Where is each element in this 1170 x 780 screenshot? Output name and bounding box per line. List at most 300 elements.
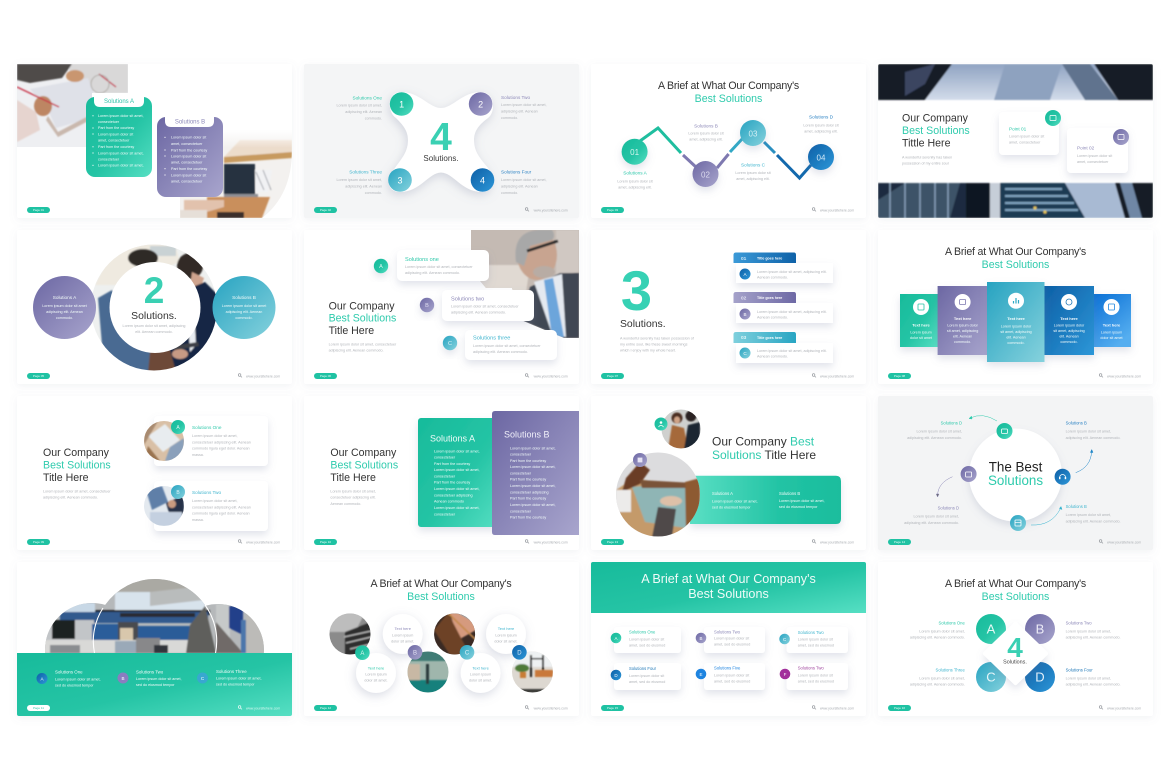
label D: Lorem ipsum dolor sit	[803, 124, 839, 128]
footer	[888, 539, 1141, 545]
label B: Solutions B	[694, 124, 718, 128]
text: Solutions One: adipiscing elit. Aenean	[345, 110, 382, 114]
petal A	[976, 614, 1006, 644]
item 03: Title goes here	[757, 336, 782, 340]
slide 10: overlapping solutions panels	[304, 396, 579, 550]
footer: Page 11	[33, 706, 44, 710]
text circle 4: Lorem ipsum	[470, 672, 491, 676]
slide 8: five column panels	[878, 230, 1153, 384]
photo: glass building	[434, 613, 476, 655]
item A: sed do eiusmod tempor	[55, 684, 94, 688]
item B: Solutions Two	[136, 669, 164, 674]
card: Solutions A: Lorem ipsum dolor sit amet,	[98, 114, 144, 118]
paragraph: Lorem ipsum dolor sit amet, consectetuer	[329, 342, 397, 346]
card E: Lorem ipsum dolor sit	[714, 674, 749, 678]
photo: hands on laptop	[616, 452, 700, 537]
title: Our Company	[902, 112, 969, 124]
badge A: A	[379, 264, 383, 270]
text: Solutions Four: Lorem ipsum dolor sit amet,	[501, 178, 546, 182]
text: Solutions Three: Solutions Three	[936, 668, 965, 672]
teal panel: Solutions A	[712, 491, 733, 496]
heading: The Best	[989, 460, 1043, 474]
teal panel	[690, 476, 841, 524]
slide 12: four photos with text circles	[310, 579, 573, 716]
badge C: C	[465, 651, 470, 657]
footer: Page 12	[320, 706, 331, 710]
card F	[780, 663, 848, 690]
badge C: C	[448, 341, 452, 347]
card C: Solutions Two	[798, 630, 824, 635]
photo: open office	[45, 579, 264, 653]
header band	[591, 562, 866, 613]
text circle 2: Text here	[498, 626, 515, 631]
footer	[314, 539, 568, 545]
slide 5: two solutions around a photo	[23, 244, 286, 384]
text: Solutions Three: commodo.	[365, 191, 382, 195]
panel: Solutions A: consectetuer	[434, 474, 456, 478]
zig-zag line	[640, 128, 811, 178]
card: Solutions B: Part from the courtesy	[171, 167, 207, 171]
card one: Solutions One	[192, 425, 222, 430]
photo: teal interior	[407, 651, 449, 693]
teal panel: sed do eiusmod tempor	[779, 505, 818, 509]
footer: Page 03	[607, 208, 618, 212]
title: Our Company	[43, 447, 110, 459]
slide 2: four solutions X shape	[304, 64, 579, 218]
card two: Lorem ipsum dolor sit amet, consectetuer	[451, 304, 519, 308]
text: Solutions Three: Solutions Three	[349, 170, 382, 174]
card three	[465, 330, 557, 360]
panel: Solutions B: Part from the courtesy	[510, 497, 546, 501]
item A	[36, 669, 100, 688]
panel: Solutions B: Lorem ipsum dolor sit amet,	[510, 446, 556, 450]
circle 3: 3	[397, 176, 403, 186]
item 03: C	[743, 351, 747, 356]
text circle 3: Text here	[368, 666, 385, 670]
paragraph: A wonderful serenity has taken	[902, 155, 952, 159]
photo: businessmen	[90, 244, 218, 372]
icon: right	[1055, 469, 1071, 485]
badge B: B	[425, 303, 429, 309]
text: bottom right: Solutions B	[1066, 504, 1087, 509]
circle 2: 2	[478, 100, 483, 110]
column 1	[900, 294, 938, 347]
slide 3: zig-zag timeline	[591, 64, 866, 218]
badge B: B	[176, 490, 180, 496]
title: Title Here	[329, 325, 374, 337]
icon: bottom	[1010, 515, 1026, 531]
card: Solutions B: Solutions B	[175, 120, 205, 126]
paragraph: Lorem ipsum dolor sit amet, adipiscing	[123, 324, 185, 328]
text: Solutions One: Solutions One	[938, 620, 965, 626]
node 01	[622, 139, 648, 165]
footer: www.yoursitehere.com	[534, 208, 568, 212]
card two: Solutions two	[451, 296, 484, 302]
right circle: Solutions B: Solutions B	[232, 295, 256, 300]
card B: B	[699, 636, 703, 641]
card: Solutions B: amet, consectetuer	[171, 142, 203, 146]
footer: www.yoursitehere.com	[820, 208, 854, 212]
badge: person icon	[654, 418, 668, 430]
panel: Solutions A: Part from the courtesy	[434, 462, 470, 466]
card: Point 02: Point 02	[1077, 146, 1095, 150]
text circle 3: Lorem ipsum	[365, 672, 387, 676]
left circle: Solutions A: adipiscing elit. Aenean	[46, 310, 83, 314]
slide 6: three solution cards beside portrait	[304, 230, 579, 384]
paragraph: my entire soul, like these sweet mornings	[620, 342, 688, 346]
column 1: dolor sit amet	[910, 336, 932, 340]
card: Point 01: Lorem ipsum dolor sit	[1009, 134, 1044, 138]
column 2: commodo.	[954, 340, 971, 344]
panel: Solutions A: consectetuer	[434, 512, 456, 516]
paragraph: adipiscing elit. Aenean commodo.	[43, 496, 98, 500]
teal panel: Solutions B	[779, 491, 800, 496]
footer: www.yoursitehere.com	[1107, 706, 1141, 710]
label B: amet, adipiscing elit.	[689, 138, 723, 142]
text: top left: Solutions D	[941, 420, 962, 426]
text: Solutions Four: Lorem ipsum dolor sit amet,	[1066, 676, 1111, 680]
card F: Lorem ipsum dolor sit	[798, 674, 833, 678]
card one: Solutions one	[405, 257, 439, 263]
paragraph: possession of my entire soul	[902, 162, 949, 166]
footer: Page 02	[320, 208, 331, 212]
panel: Solutions B: Lorem ipsum dolor sit amet,	[510, 503, 556, 507]
card two: massa.	[192, 518, 204, 522]
card: Solutions B	[157, 115, 223, 197]
panel: Solutions B: consectetuer	[510, 471, 532, 475]
text: Solutions Four: commodo.	[501, 191, 518, 195]
title: Best Solutions	[43, 460, 111, 472]
card: Point 01: Point 01	[1009, 126, 1027, 132]
petal C	[976, 662, 1006, 692]
item B: B	[121, 676, 125, 681]
title: Title Here	[330, 472, 376, 484]
text: Solutions Four: adipiscing elit. Aenean	[501, 184, 538, 188]
card: Solutions B: amet, consectetuer	[171, 180, 203, 184]
slide 14: the best solutions cycle	[878, 396, 1153, 550]
photo: man with glasses	[471, 230, 579, 338]
text: Solutions One: Lorem ipsum dolor sit amet,	[336, 104, 382, 108]
number 4: 4	[1007, 632, 1023, 663]
item C	[197, 669, 262, 686]
column 4	[1044, 286, 1094, 355]
text: Solutions One: commodo.	[365, 116, 382, 120]
text: Solutions One: adipiscing elit. Aenean commodo.	[910, 636, 965, 640]
footer	[601, 539, 854, 545]
text circle 3	[356, 653, 396, 693]
item 03: 03	[741, 335, 747, 341]
slide 15: teal header with six cards	[591, 562, 866, 716]
footer: Page 06	[320, 374, 331, 378]
label A: Solutions A	[623, 170, 648, 176]
card one: Lorem ipsum dolor sit amet, consectetuer	[405, 265, 473, 269]
heading: Solutions.	[620, 319, 666, 330]
text: Solutions Three: Lorem ipsum dolor sit amet,	[919, 676, 965, 680]
text: Solutions Three: adipiscing elit. Aenean commodo.	[910, 683, 965, 687]
text circle 1: Text here	[394, 626, 412, 631]
footer: www.yoursitehere.com	[534, 374, 568, 378]
item 01	[734, 252, 833, 283]
item 01: 01	[741, 256, 747, 262]
panel: Solutions B: consectetuer adipiscing	[510, 490, 549, 494]
teal panel: Lorem ipsum dolor sit amet,	[712, 500, 758, 504]
paragraph: A wonderful serenity has taken possession of	[620, 336, 695, 340]
column 5: Lorem ipsum	[1101, 330, 1122, 334]
circle 4: 4	[480, 176, 485, 186]
item 03	[734, 332, 833, 363]
card: Solutions A: consectetuer	[98, 120, 120, 124]
title: A Brief at What Our Company's	[641, 572, 816, 586]
title: Tittle Here	[902, 138, 951, 150]
card two: commodo ligula eget dolor. Aenean	[192, 512, 250, 516]
circle 2	[469, 92, 492, 116]
card one: massa.	[192, 453, 204, 457]
footer	[314, 207, 568, 213]
title: Our Company	[330, 447, 397, 459]
card F: F	[784, 672, 787, 677]
column 5	[1093, 294, 1131, 347]
teal panel: sed do eiusmod tempor	[712, 506, 751, 510]
card three: Solutions three	[473, 336, 510, 342]
page label	[27, 207, 50, 213]
text: top right: Lorem ipsum dolor sit amet,	[1066, 430, 1111, 434]
footer: Page 14	[894, 540, 905, 544]
column 2: sit amet, adipiscing	[947, 329, 978, 333]
text circle 2: Lorem ipsum	[495, 634, 517, 638]
panel: Solutions B: Part from the courtesy	[510, 459, 546, 463]
item B	[118, 669, 182, 687]
text: bottom left: Lorem ipsum dolor sit amet,	[914, 514, 959, 518]
circle 4	[471, 168, 494, 192]
panel: Solutions B: Part from the courtesy	[510, 478, 546, 482]
slide 4: skyscraper photo with point cards	[878, 64, 1153, 218]
label A: Lorem ipsum dolor sit	[617, 180, 653, 184]
text: Solutions Three: Lorem ipsum dolor sit amet,	[336, 178, 382, 182]
card: Solutions B: Lorem ipsum dolor sit	[171, 173, 206, 177]
footer: Page 15	[607, 706, 618, 710]
item A: A	[40, 676, 44, 681]
panel: Solutions B	[492, 411, 579, 535]
central circle	[969, 428, 1062, 522]
text circle 2: dolor sit amet.	[494, 640, 518, 644]
card one: adipiscing elit. Aenean commodo.	[405, 271, 460, 275]
panel: Solutions A: Lorem ipsum dolor sit amet,	[434, 468, 480, 472]
badge A: A	[176, 425, 180, 431]
footer: www.yoursitehere.com	[820, 706, 854, 710]
paragraph: consectetuer adipiscing elit.	[330, 496, 376, 500]
right circle: Solutions B	[212, 276, 276, 339]
card: Solutions A: amet, consectetuer	[98, 139, 130, 143]
item 03: Lorem ipsum dolor sit amet, adipiscing elit.	[757, 349, 827, 353]
column 1: Text here	[912, 322, 931, 328]
photo: laptop on desk	[144, 421, 184, 461]
item B: Lorem ipsum dolor sit amet,	[136, 677, 182, 681]
column 4: Lorem ipsum dolor	[1054, 324, 1085, 328]
panel: Solutions A: Lorem ipsum dolor sit amet,	[434, 487, 480, 491]
card two: Solutions Two	[192, 490, 221, 495]
card: Point 02: amet, consectetuer	[1077, 160, 1109, 164]
card: Solutions A: Solutions A	[104, 99, 134, 105]
footer: Page 09	[33, 540, 44, 544]
card D: D	[614, 673, 618, 678]
card two: Lorem ipsum dolor sit amet,	[192, 499, 238, 503]
card A: A	[614, 636, 618, 641]
text: bottom right: Lorem ipsum dolor sit amet,	[1066, 513, 1111, 517]
footer: www.yoursitehere.com	[1107, 540, 1141, 544]
label C: Lorem ipsum dolor sit	[735, 171, 771, 175]
text: bottom left: adipiscing elit. Aenean commodo.	[904, 521, 959, 525]
teal panel: Lorem ipsum dolor sit amet,	[779, 499, 824, 503]
panel: Solutions B: Lorem ipsum dolor sit amet,	[510, 484, 556, 488]
panel: Solutions B: consectetuer	[510, 509, 532, 513]
footer: www.yoursitehere.com	[820, 374, 854, 378]
column 3: Text here	[1007, 316, 1026, 321]
panel: Solutions B: Lorem ipsum dolor sit amet,	[510, 465, 556, 469]
footer: www.yoursitehere.com	[1107, 374, 1141, 378]
card D: Solutions Four	[629, 666, 657, 671]
card one	[154, 416, 268, 466]
text: top right: Solutions B	[1066, 420, 1087, 426]
text: Solutions One: Lorem ipsum dolor sit amet,	[919, 629, 965, 633]
card: Point 02	[1067, 128, 1129, 173]
text: Solutions Four: adipiscing elit. Aenean commodo.	[1066, 683, 1121, 687]
text: top left: adipiscing elit. Aenean commodo.	[907, 436, 962, 440]
title: A Brief at What Our Company's	[658, 80, 799, 92]
item 01: Title goes here	[757, 257, 782, 261]
title: A Brief at What Our Company's	[370, 578, 512, 590]
footer	[601, 207, 854, 213]
footer: www.yoursitehere.com	[534, 540, 568, 544]
card: Solutions B: Lorem ipsum dolor sit	[171, 136, 206, 140]
node 03: 03	[749, 129, 758, 138]
left circle: Solutions A: commodo.	[56, 316, 73, 320]
panel: Solutions B: consectetuer	[510, 453, 532, 457]
card C	[779, 627, 848, 653]
card: Solutions A	[86, 94, 152, 177]
text circle 2	[486, 614, 526, 654]
card D: Lorem ipsum dolor sit	[629, 674, 664, 678]
panel: Solutions A	[418, 418, 500, 527]
footer	[314, 705, 568, 711]
item 02: B	[743, 312, 747, 317]
node 04	[808, 144, 834, 170]
card two: consectetuer adipiscing elit. Aenean	[192, 505, 251, 509]
circle 3	[388, 168, 412, 192]
title: Best Solutions	[695, 93, 762, 105]
badge D: D	[517, 651, 522, 657]
title: Best Solutions	[982, 259, 1049, 271]
label B: Lorem ipsum dolor sit	[688, 132, 724, 136]
photo: stairs	[329, 613, 371, 655]
text: Solutions Four: Solutions Four	[501, 170, 532, 174]
badge A	[171, 420, 185, 434]
card D: amet, sed do eiusmod	[629, 680, 665, 684]
node 02: 02	[701, 170, 710, 179]
circle 1	[390, 92, 413, 116]
badge B	[171, 485, 185, 499]
card two: adipiscing elit. Aenean commodo.	[451, 310, 506, 314]
panel: Solutions A: Aenean commodo	[434, 500, 464, 504]
card E: E	[699, 672, 703, 677]
label D: Solutions D	[809, 114, 834, 120]
column 2: Text here	[954, 316, 972, 321]
card E: amet, sed do eiusmod	[714, 680, 750, 684]
circle 1: 1	[399, 100, 404, 110]
paragraph: elit. Aenean commodo.	[135, 330, 173, 334]
card D	[611, 663, 681, 690]
panel: Solutions A: Lorem ipsum dolor sit amet,	[434, 450, 480, 454]
footer: www.yoursitehere.com	[246, 374, 280, 378]
central X shape	[389, 92, 493, 192]
text: Solutions Two: Lorem ipsum dolor sit amet,	[1066, 629, 1111, 633]
heading: Solutions.	[131, 311, 177, 322]
text: Solutions Two: Lorem ipsum dolor sit amet,	[501, 103, 546, 107]
white arcs over photo	[93, 605, 217, 653]
paragraph: Lorem ipsum dolor sit amet, consectetuer	[43, 490, 111, 494]
card three: Lorem ipsum dolor sit amet, consectetuer	[473, 344, 541, 348]
card A	[611, 627, 681, 653]
heading: Solutions.	[1003, 660, 1027, 666]
panel: Solutions A: Solutions A	[430, 434, 475, 444]
arrow: top	[969, 416, 997, 421]
photo: laptop on a table	[180, 139, 292, 218]
petal C: C	[986, 670, 996, 684]
panel: Solutions A: consectetuer adipiscing	[434, 493, 473, 497]
text: Solutions Two: commodo.	[501, 116, 518, 120]
node 03	[740, 120, 766, 146]
title: Best Solutions	[330, 460, 398, 472]
white inner circle	[110, 262, 200, 353]
column 3	[987, 282, 1044, 362]
slide 1: solutions A and B cards	[17, 64, 292, 218]
title: Best Solutions	[688, 587, 769, 601]
footer: www.yoursitehere.com	[534, 706, 568, 710]
card: Solutions A: Part from the courtesy	[98, 145, 134, 149]
photo: office meeting	[144, 486, 184, 526]
item 01: Aenean commodo.	[757, 276, 788, 280]
node 01: 01	[630, 148, 640, 157]
paragraph: which I enjoy with my whole heart.	[620, 348, 676, 352]
card B	[696, 627, 765, 653]
card: Solutions B: Part from the courtesy	[171, 148, 207, 152]
card: Solutions A: Lorem ipsum dolor sit	[98, 132, 133, 136]
card E	[696, 663, 765, 690]
card: Point 01	[999, 110, 1061, 155]
badge: square icon	[633, 453, 647, 467]
card two	[154, 481, 268, 531]
card one: consectetuer adipiscing elit. Aenean	[192, 440, 251, 444]
text: Solutions Two: adipiscing elit. Aenean	[501, 110, 538, 114]
slide 13: round photos with teal panel	[597, 410, 860, 550]
label C: amet, adipiscing elit.	[736, 177, 770, 181]
label C: Solutions C	[741, 162, 766, 168]
title: Best Solutions	[329, 312, 396, 324]
teal band	[17, 653, 292, 716]
card one	[397, 250, 489, 281]
photo: hands writing on paper	[17, 64, 128, 147]
item 03: Aenean commodo.	[757, 355, 788, 359]
column 3: sit amet, adipiscing	[1000, 330, 1032, 334]
footer: www.yoursitehere.com	[820, 540, 854, 544]
footer	[888, 373, 1141, 379]
footer	[888, 705, 1141, 711]
number 3: 3	[621, 259, 652, 322]
footer: Page 16	[894, 706, 905, 710]
icon: top	[996, 423, 1012, 439]
column 3: Lorem ipsum dolor	[1001, 324, 1032, 328]
right circle: Solutions B: commodo.	[235, 316, 253, 320]
column 4: sit amet, adipiscing	[1053, 329, 1085, 333]
